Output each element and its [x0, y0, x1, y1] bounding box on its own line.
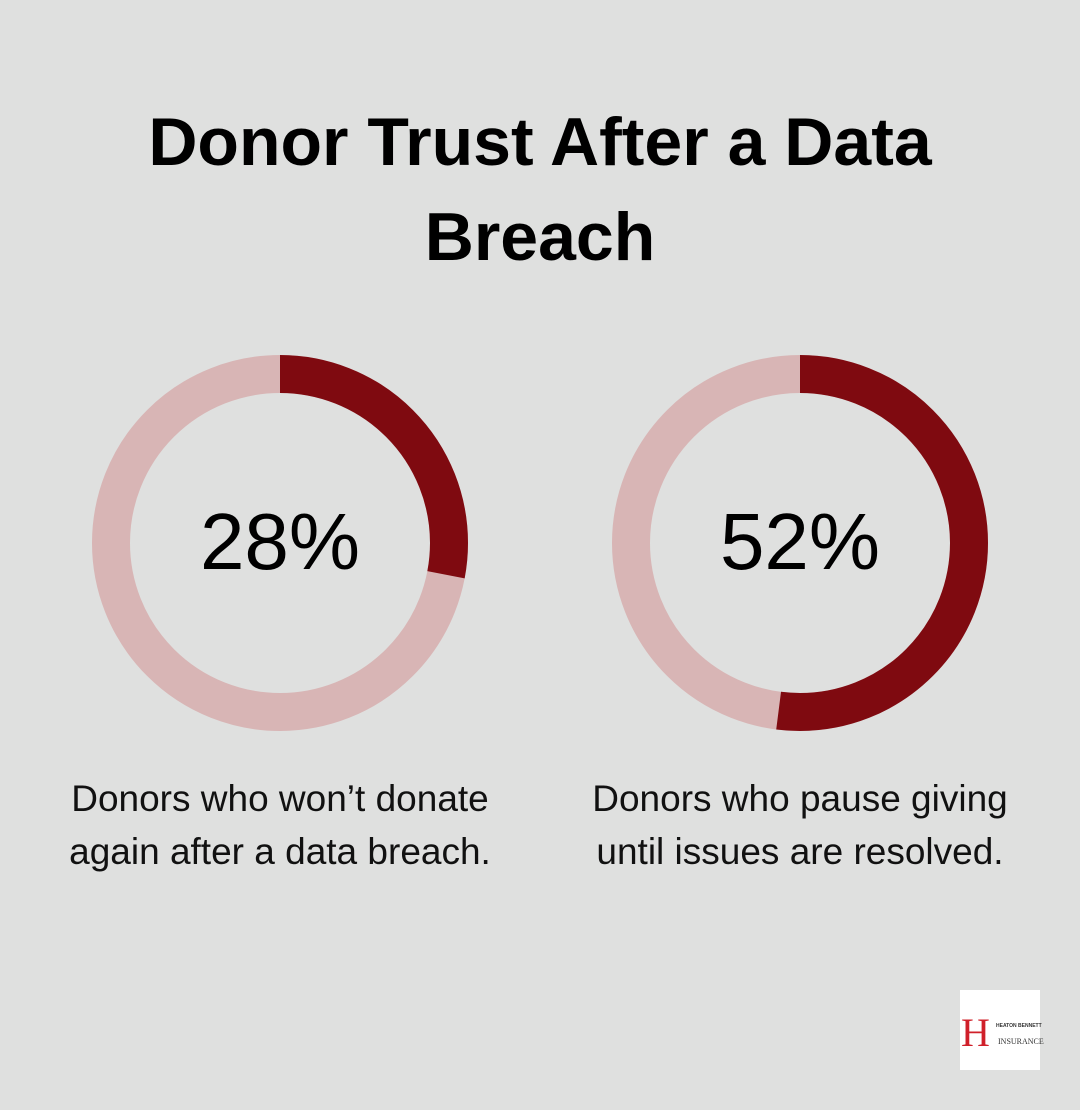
- caption 1: [69, 778, 491, 872]
- caption 1: Donors who won’t donate: [71, 778, 489, 819]
- caption 2: until issues are resolved.: [596, 831, 1004, 872]
- logo: H: [961, 1010, 990, 1055]
- title: Breach: [425, 199, 655, 275]
- title: [148, 104, 932, 275]
- logo: HEATON BENNETT: [996, 1023, 1042, 1029]
- chart: donut 28%: [92, 355, 468, 731]
- caption 1: again after a data breach.: [69, 831, 491, 872]
- chart: donut 52%: 52%: [720, 497, 880, 586]
- logo: [960, 990, 1040, 1070]
- logo: INSURANCE: [998, 1037, 1044, 1046]
- chart: donut 28%: 28%: [200, 497, 360, 586]
- title: Donor Trust After a Data: [148, 104, 932, 180]
- caption 2: [592, 778, 1008, 872]
- caption 2: Donors who pause giving: [592, 778, 1008, 819]
- chart: donut 52%: [612, 355, 988, 731]
